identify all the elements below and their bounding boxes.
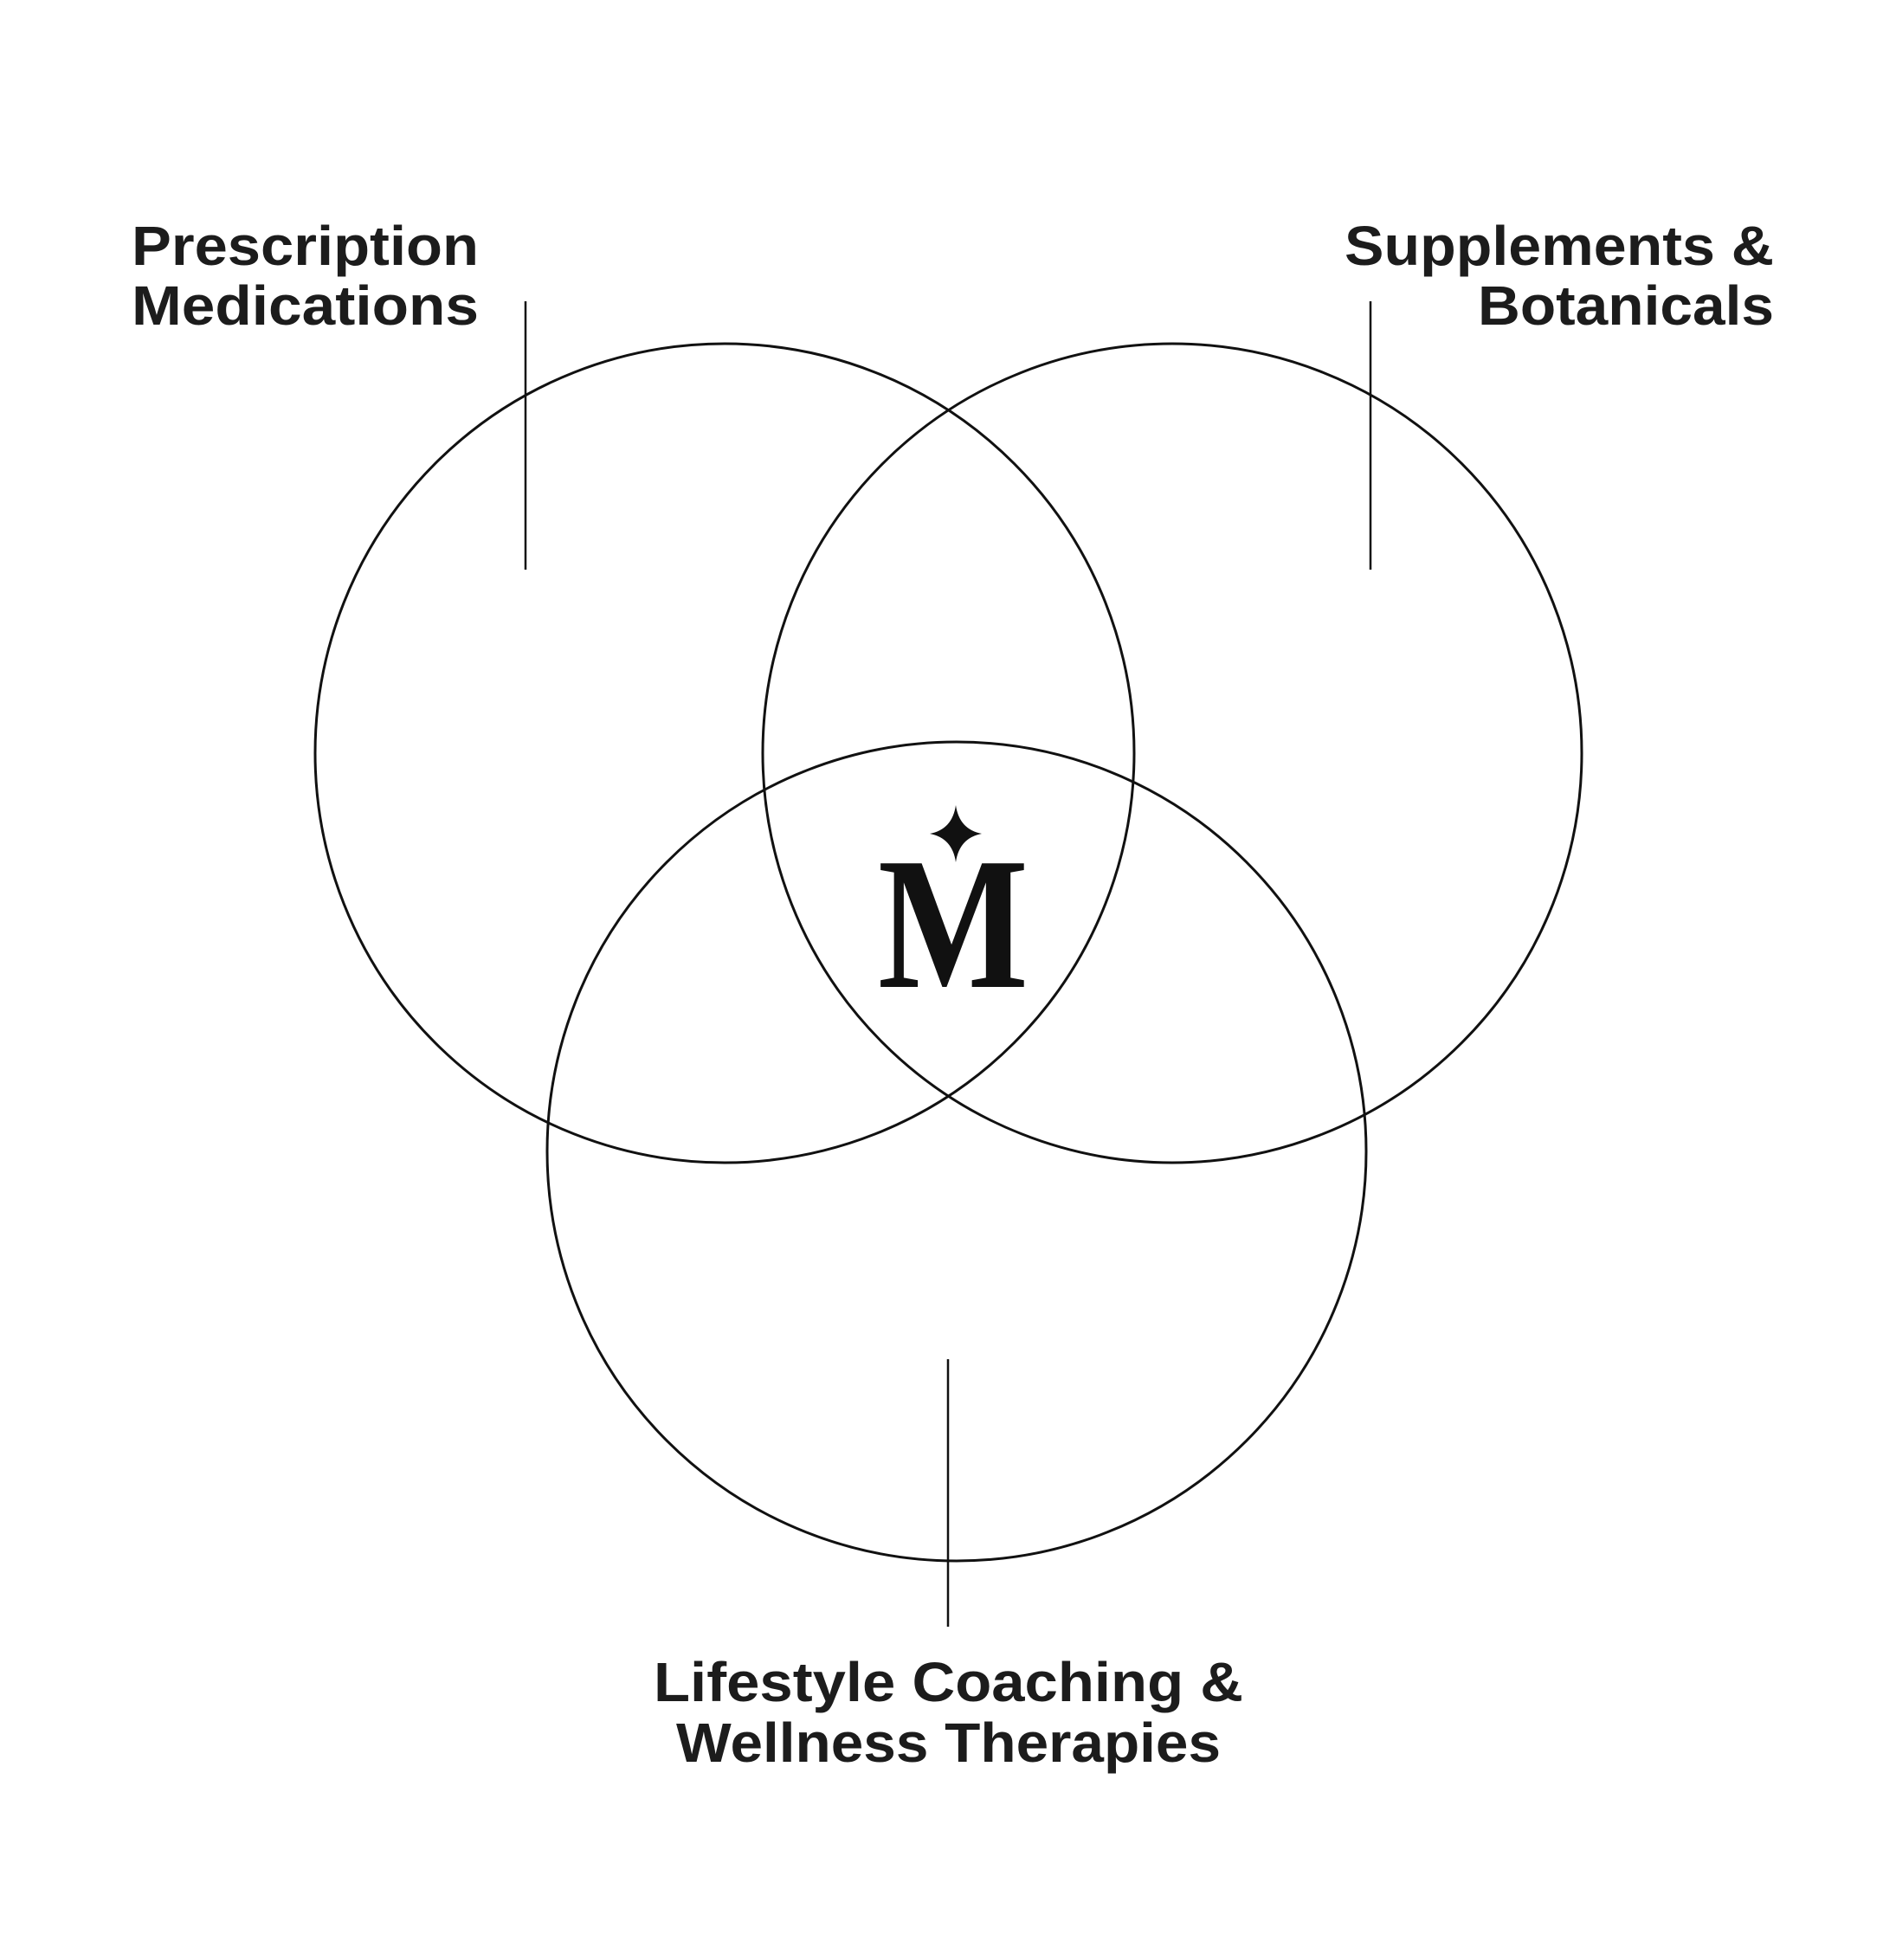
label: prescription medications: Medications (132, 274, 479, 337)
leader line: supplements (1370, 301, 1371, 570)
label: prescription medications (132, 215, 479, 337)
icon: star (930, 805, 982, 862)
label: supplements & botanicals: Botanicals (1478, 274, 1774, 337)
logo: M with star (878, 805, 1029, 1028)
leader line: lifestyle (947, 1359, 949, 1627)
circle: supplements & botanicals (763, 344, 1582, 1163)
label: lifestyle coaching & wellness therapies: Wellness Therapies (676, 1712, 1221, 1774)
leader line: prescription (525, 301, 526, 570)
circle: prescription medications (315, 344, 1134, 1163)
label: supplements & botanicals (1345, 215, 1774, 337)
label: supplements & botanicals: Supplements & (1345, 215, 1774, 277)
circle: lifestyle coaching (547, 742, 1366, 1561)
label: lifestyle coaching & wellness therapies: Lifestyle Coaching & (654, 1651, 1243, 1713)
venn diagram (315, 344, 1582, 1561)
label: prescription medications: Prescription (132, 215, 479, 277)
label: lifestyle coaching & wellness therapies (654, 1651, 1243, 1774)
logo letter M: M (878, 820, 1029, 1028)
